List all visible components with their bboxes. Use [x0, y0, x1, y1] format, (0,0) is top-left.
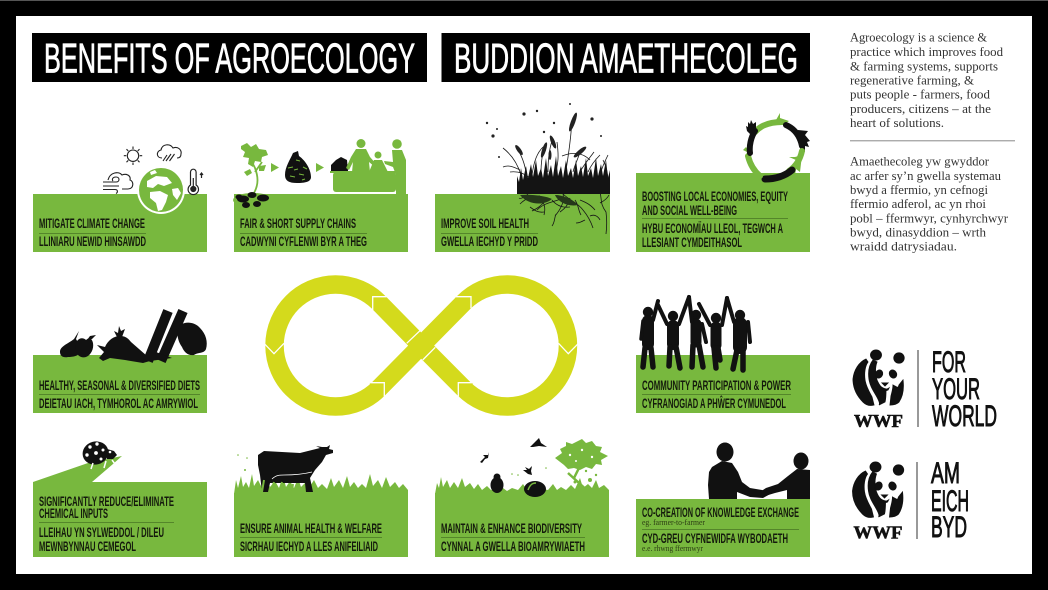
intro text: Welsh: ac arfer sy’n gwella systemau	[850, 169, 1001, 183]
icon: panda	[852, 462, 904, 517]
title: English	[32, 33, 427, 82]
panel: boosting local economies: LLESIANT CYMDEITHASOL	[642, 234, 742, 250]
panel: healthy diets: HEALTHY, SEASONAL & DIVERSIFIED DIETS	[39, 377, 200, 393]
panel: animal health and welfare	[234, 445, 408, 557]
panel: biodiversity	[435, 438, 609, 557]
intro text: Welsh: pobl – ffermwyr, cynhyrchwyr	[850, 211, 1009, 225]
intro text: Welsh: bwyd, dinasyddion – wrth	[850, 225, 987, 239]
icon: potato sack	[285, 151, 311, 183]
wordmark: For Your World: WORLD	[932, 400, 997, 433]
panel: animal health and welfare: ENSURE ANIMAL HEALTH & WELFARE	[240, 520, 382, 536]
logo: WWF Am Eich Byd	[852, 457, 969, 544]
panel: fair and short supply chains: CADWYNI CYFLENWI BYR A THEG	[240, 233, 367, 249]
wordmark: For Your World: FOR	[932, 346, 966, 379]
icon: arrow	[316, 163, 324, 172]
icon: wind cloud	[103, 173, 133, 194]
panel: boosting local economies	[636, 113, 810, 252]
panel: biodiversity: CYNNAL A GWELLA BIOAMRYWIAETH	[441, 538, 585, 554]
panel: fair and short supply chains	[233, 139, 408, 252]
icon: tree, birds and sheep	[480, 438, 608, 497]
intro text: English: practice which improves food	[850, 45, 1004, 59]
panel: animal health and welfare: SICRHAU IECHYD A LLES ANIFEILIAID	[240, 538, 378, 554]
panel: reduce chemical inputs: SIGNIFICANTLY REDUCE/ELIMINATE	[39, 493, 174, 509]
icon: globe	[137, 166, 185, 214]
intro text: Welsh	[850, 155, 1009, 254]
title: Welsh: BUDDION AMAETHECOLEG	[454, 34, 798, 82]
wordmark: WWF: WWF	[854, 411, 903, 431]
panel: community participation: COMMUNITY PARTICIPATION & POWER	[642, 377, 791, 393]
icon: grasses with roots and insects	[486, 103, 610, 234]
panel: mitigate climate change: MITIGATE CLIMATE CHANGE	[39, 215, 145, 231]
intro text: English: puts people - farmers, food	[850, 88, 991, 102]
icon: ring of hands	[743, 113, 810, 179]
wordmark: For Your World	[932, 346, 997, 433]
panel: mitigate climate change	[33, 145, 207, 252]
intro text: Welsh: ffermio adferol, ac yn rhoi	[850, 197, 987, 211]
title: English: BENEFITS OF AGROECOLOGY	[44, 34, 415, 82]
panel: improve soil health	[435, 103, 610, 252]
infinity symbol	[264, 284, 578, 406]
panel: boosting local economies: BOOSTING LOCAL ECONOMIES, EQUITY	[642, 188, 788, 204]
icon: thermometer	[188, 169, 203, 195]
panel: reduce chemical inputs	[33, 439, 207, 557]
panel: improve soil health: IMPROVE SOIL HEALTH	[441, 215, 529, 231]
panel: reduce chemical inputs: LLEIHAU YN SYLWEDDOL / DILEU	[39, 524, 164, 540]
grass	[234, 454, 408, 557]
panel: mitigate climate change: LLINIARU NEWID HINSAWDD	[39, 233, 146, 249]
panel: co-creation of knowledge: CO-CREATION OF KNOWLEDGE EXCHANGE	[642, 504, 799, 520]
panel: healthy diets: DEIETAU IACH, TYMHOROL AC AMRYWIOL	[39, 395, 198, 411]
icon: people with raised arms	[641, 297, 750, 370]
icon: panda	[853, 350, 904, 405]
intro text: English: Agroecology is a science &	[850, 31, 987, 45]
grass	[435, 477, 609, 557]
panel: co-creation of knowledge: e.e. rhwng ffermwyr	[642, 544, 703, 553]
panel: reduce chemical inputs: CHEMICAL INPUTS	[39, 505, 108, 521]
panel: healthy diets	[33, 311, 207, 413]
panel: co-creation of knowledge	[636, 442, 810, 557]
intro text: English: producers, citizens – at the	[850, 102, 992, 116]
icon: rain cloud	[157, 145, 181, 161]
intro text: Welsh: Amaethecoleg yw gwyddor	[850, 155, 990, 169]
icon: cow and calf	[255, 445, 333, 492]
panel: reduce chemical inputs: MEWNBYNNAU CEMEGOL	[39, 538, 136, 554]
panel: improve soil health: GWELLA IECHYD Y PRIDD	[441, 233, 538, 249]
panel: community participation	[636, 297, 810, 413]
icon: sun	[124, 146, 142, 165]
panel: boosting local economies: AND SOCIAL WELL-BEING	[642, 202, 737, 218]
wordmark: WWF: WWF	[854, 522, 902, 542]
intro text: English	[850, 31, 1004, 130]
icon: handshake	[708, 442, 810, 499]
wordmark: Am Eich Byd: BYD	[931, 511, 967, 544]
icon: potato plant	[233, 143, 273, 208]
wordmark: Am Eich Byd: EICH	[931, 485, 969, 518]
icon: arrow	[271, 163, 279, 172]
panel: community participation: CYFRANOGIAD A PHŴER CYMUNEDOL	[642, 394, 786, 411]
intro text: Welsh: wraidd datrysiadau.	[850, 240, 957, 254]
logo: WWF For Your World	[853, 346, 997, 433]
icon: fruit and vegetables	[60, 311, 207, 363]
panel: fair and short supply chains: FAIR & SHORT SUPPLY CHAINS	[240, 215, 356, 231]
intro text: Welsh: bwyd a ffermio, yn cefnogi	[850, 183, 989, 197]
panel: boosting local economies: HYBU ECONOMÏAU LLEOL, TEGWCH A	[642, 220, 783, 236]
intro text: English: regenerative farming, &	[850, 73, 974, 87]
panel: biodiversity: MAINTAIN & ENHANCE BIODIVERSITY	[441, 520, 582, 536]
panel: co-creation of knowledge: eg. farmer-to-farmer	[642, 518, 705, 527]
icon: market stall with people	[330, 139, 406, 194]
wordmark: Am Eich Byd: AM	[931, 457, 960, 490]
wordmark: For Your World: YOUR	[932, 373, 980, 406]
wordmark: Am Eich Byd	[931, 457, 969, 544]
panel: co-creation of knowledge: CYD-GREU CYFNEWIDFA WYBODAETH	[642, 530, 788, 546]
intro text: English: & farming systems, supports	[850, 59, 998, 73]
intro text: English: heart of solutions.	[850, 116, 944, 130]
icon: ladybird	[80, 439, 119, 469]
title: Welsh	[442, 33, 810, 82]
